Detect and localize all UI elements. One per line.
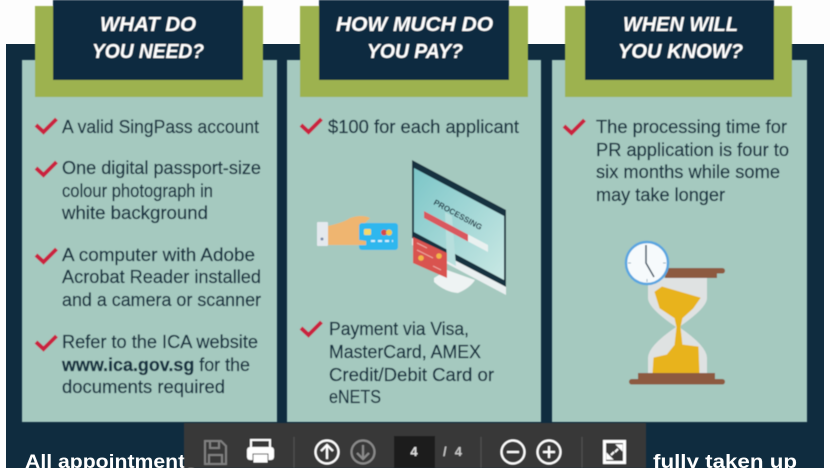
- heading: when will you know: YOU KNOW?: [618, 41, 743, 63]
- icon: page down: [352, 440, 374, 464]
- checklist: requirements: One digital passport-size: [62, 158, 261, 178]
- bottom note: [25, 452, 797, 468]
- payment methods: Payment via Visa,: [329, 319, 469, 339]
- heading: how much do you pay: [300, 0, 528, 97]
- checklist: requirements: A valid SingPass account: [62, 117, 259, 137]
- panel background: [552, 60, 807, 422]
- checklist: requirements: Refer to the ICA website: [62, 332, 258, 352]
- heading: what do you need: [35, 0, 263, 97]
- payment methods: eNETS: [329, 387, 381, 407]
- fee line: $100 for each applicant: [328, 117, 519, 137]
- processing time text: [564, 117, 789, 205]
- PDF viewer toolbar: [184, 423, 646, 468]
- icon: print: [247, 440, 274, 463]
- page number box: 4: [410, 444, 418, 459]
- heading: what do you need: YOU NEED?: [92, 41, 204, 63]
- checklist: requirements: A computer with Adobe: [62, 245, 255, 265]
- icon: processing monitor: [412, 160, 506, 295]
- heading: when will you know: WHEN WILL: [623, 14, 738, 36]
- payment methods: Credit/Debit Card or: [329, 365, 494, 385]
- checklist: requirements: white background: [61, 203, 208, 223]
- icon: clock: [626, 242, 668, 284]
- panel: when will you know: [552, 0, 807, 422]
- heading: what do you need: WHAT DO: [100, 14, 196, 36]
- checklist: requirements: Acrobat Reader installed: [62, 267, 261, 287]
- payment methods: MasterCard, AMEX: [329, 342, 481, 362]
- icon: save: [205, 441, 226, 464]
- panel background: [287, 60, 541, 422]
- checklist: requirements: colour photograph in: [62, 181, 213, 201]
- heading: when will you know: [565, 0, 792, 97]
- heading: how much do you pay: HOW MUCH DO: [336, 14, 493, 36]
- page number box: [394, 436, 435, 468]
- processing time text: PR application is four to: [596, 140, 789, 160]
- panel background: [22, 60, 277, 422]
- payment methods: [301, 319, 494, 407]
- icon: processing monitor: PROCESSING: [432, 198, 484, 232]
- processing time text: The processing time for: [596, 117, 787, 137]
- icon: page up: [316, 440, 338, 464]
- icon: hourglass: [629, 268, 725, 384]
- panel: how much do you pay: [287, 0, 541, 422]
- icon: hand holding card: [317, 216, 398, 250]
- icon: fit to page: [603, 440, 626, 464]
- icon: zoom out: [502, 440, 524, 464]
- processing time text: six months while some: [596, 162, 780, 182]
- page total: / 4: [443, 444, 463, 459]
- icon: zoom in: [538, 440, 560, 464]
- checklist: requirements: [36, 117, 261, 397]
- panel: what do you need: [22, 0, 277, 422]
- checklist: requirements: www.ica.gov.sg for the: [61, 355, 250, 375]
- checklist: requirements: and a camera or scanner: [62, 290, 261, 310]
- processing time text: may take longer: [596, 185, 725, 205]
- heading: how much do you pay: YOU PAY?: [367, 41, 463, 63]
- checklist: requirements: documents required: [62, 377, 225, 397]
